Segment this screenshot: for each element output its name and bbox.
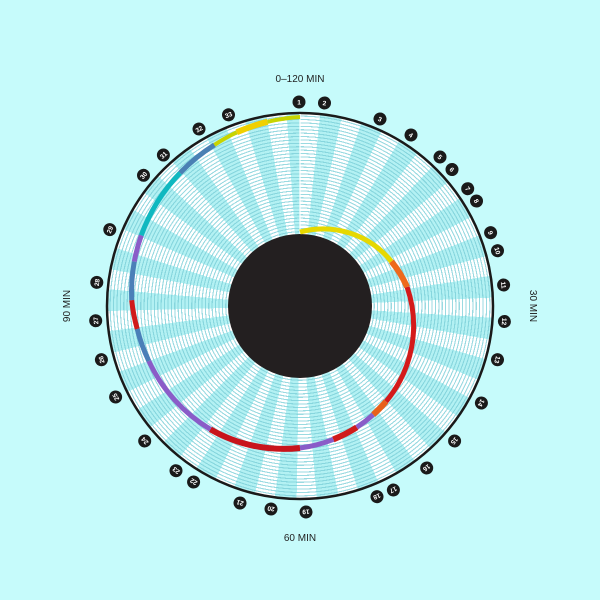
markers: 20 (267, 504, 275, 512)
markers: 2 (322, 100, 327, 108)
markers: 25 (112, 391, 121, 401)
markers: 12 (500, 318, 507, 326)
start line (299, 114, 301, 236)
markers: 21 (235, 498, 245, 507)
axis labels: 30 MIN (527, 290, 538, 322)
axis labels: 0–120 MIN (276, 74, 324, 85)
markers: 29 (106, 225, 115, 235)
markers: 26 (98, 355, 107, 364)
markers: 31 (159, 150, 169, 161)
markers: 17 (388, 484, 398, 494)
markers: 24 (140, 435, 150, 445)
markers: 13 (492, 355, 501, 364)
markers: 15 (449, 435, 459, 446)
outer ring (107, 113, 493, 499)
center disc (228, 234, 372, 378)
markers: 18 (372, 491, 381, 501)
markers: 5 (436, 154, 443, 162)
axis labels: 60 MIN (284, 533, 316, 544)
axis labels (62, 74, 538, 544)
markers: 7 (463, 186, 471, 193)
markers: 32 (195, 125, 205, 135)
markers: 16 (421, 462, 431, 473)
markers: 9 (486, 230, 494, 236)
axis labels: 90 MIN (62, 290, 73, 322)
markers: 3 (377, 116, 383, 124)
spiral (132, 117, 414, 449)
markers: 30 (139, 171, 149, 181)
markers: 10 (492, 247, 501, 256)
markers: 19 (302, 507, 310, 515)
markers: 22 (189, 476, 199, 486)
markers: 1 (297, 99, 301, 106)
markers: 28 (94, 278, 102, 287)
markers: 11 (499, 281, 507, 289)
markers (89, 96, 511, 519)
markers: 27 (93, 316, 100, 324)
markers: 23 (171, 465, 182, 475)
wheel background (107, 113, 493, 499)
markers: 33 (224, 111, 234, 120)
markers: 14 (476, 398, 485, 408)
markers: 6 (448, 166, 455, 174)
markers: 8 (472, 198, 480, 205)
markers: 4 (407, 132, 414, 140)
